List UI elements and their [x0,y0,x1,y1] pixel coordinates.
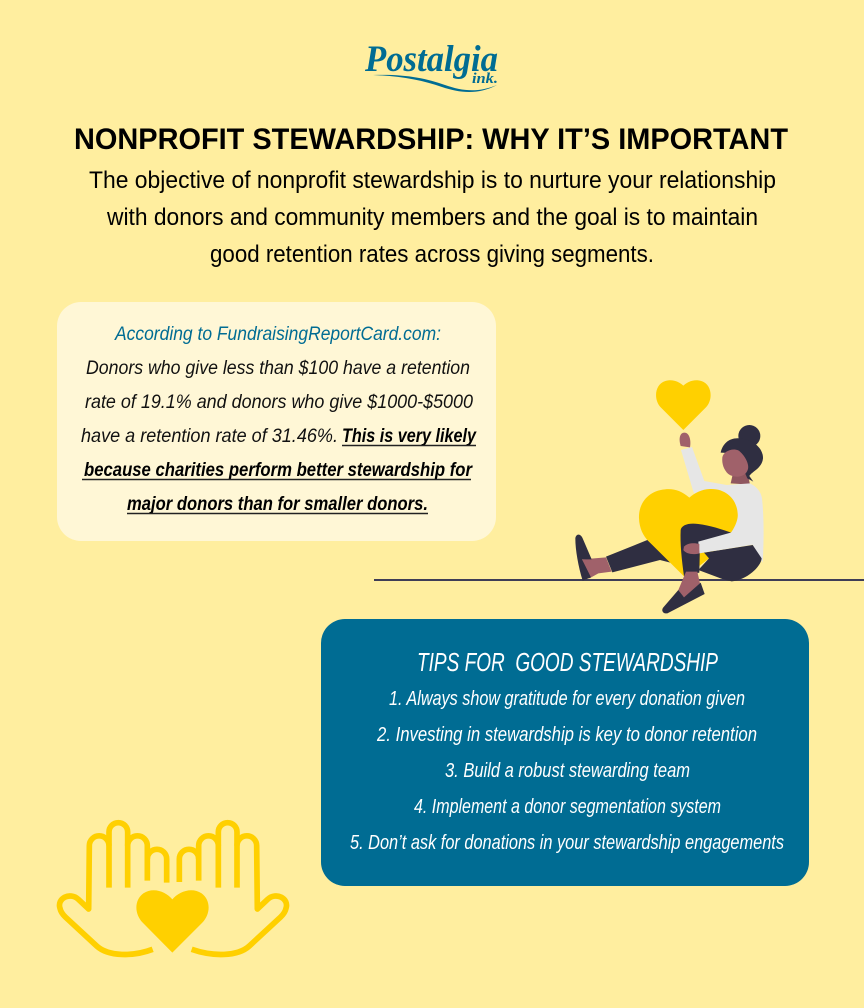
bent leg [681,524,733,576]
forearm [698,527,762,553]
icon: floating heart [656,380,711,430]
title: NONPROFIT STEWARDSHIP: WHY IT’S IMPORTANT [74,123,788,156]
intro text: good retention rates across giving segments. [210,241,654,268]
right hand [179,823,287,954]
tips list: 1. Always show gratitude for every donation given [389,688,745,710]
left hand [59,823,167,954]
panel text: have a retention rate of 31.46%. [81,426,338,447]
panel heading: According to FundraisingReportCard.com: [114,324,441,345]
panel: tips for good stewardship [321,619,809,886]
face [722,449,748,477]
panel text: major donors than for smaller donors. [127,494,428,515]
hair [721,438,763,482]
ground line [374,579,864,581]
knee hand [683,543,699,554]
panel text: This is very likely [342,426,477,447]
intro text: with donors and community members and the goal is to maintain [106,204,758,231]
panel text: because charities perform better stewardship for [84,460,473,481]
left shoe [575,535,592,581]
extended leg [606,540,673,572]
illustration: woman sitting with hearts [575,380,764,613]
tips list: 3. Build a robust stewarding team [445,760,690,782]
tips list: 2. Investing in stewardship is key to donor retention [376,724,757,746]
intro text [89,167,776,268]
heart [136,890,209,953]
panel text: Donors who give less than $100 have a retention [86,358,470,379]
logo: Postalgia ink: Postalgia [364,39,498,80]
neck [731,468,750,485]
left foot skin [582,557,612,578]
sweater [681,447,764,563]
panel text: rate of 19.1% and donors who give $1000-$5000 [85,392,473,413]
logo: Postalgia ink: ink. [472,71,498,87]
tips list: 4. Implement a donor segmentation system [414,796,721,818]
panel text [81,358,477,515]
big heart [639,489,738,577]
hair bun [738,425,760,447]
hips [698,545,762,581]
intro text: The objective of nonprofit stewardship is to nurture your relationship [89,167,776,194]
panel: retention statistics [57,302,496,541]
tips list [350,688,784,854]
tips heading: TIPS FOR GOOD STEWARDSHIP [417,647,718,677]
icon: open hands with heart [59,823,287,954]
raised hand [680,433,690,447]
lower foot skin [678,572,700,598]
lower shoe [662,583,705,613]
